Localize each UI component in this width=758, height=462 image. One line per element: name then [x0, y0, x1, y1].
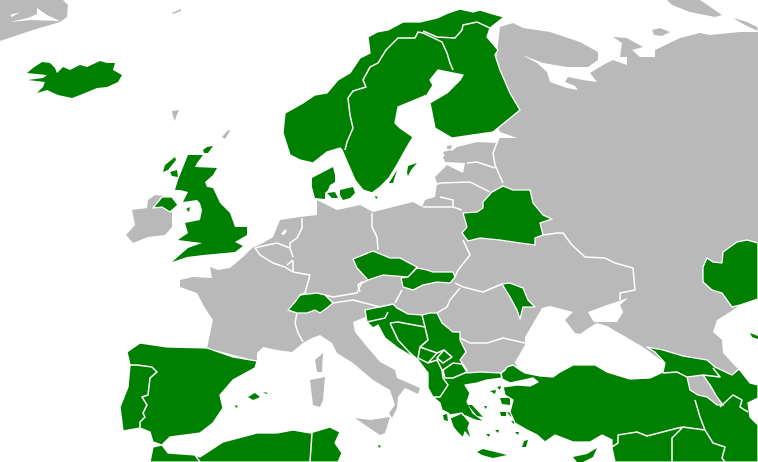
Cyprus: [573, 448, 597, 462]
Belarus: [462, 186, 552, 245]
Caspian Sea: [713, 300, 758, 385]
Black Sea: [515, 306, 665, 379]
Faroe and Shetland islands: [172, 110, 230, 139]
Turkey and the Middle East: [501, 347, 758, 462]
Nordic borders: [345, 22, 490, 150]
Evia and Greek islands: [378, 386, 528, 458]
Central Europe borders: [325, 213, 470, 307]
Jan Mayen: [172, 9, 181, 14]
Denmark: [312, 167, 378, 200]
Northern Ireland: [153, 197, 178, 212]
Armenia: [687, 375, 723, 405]
mainland Europe and Russia: [180, 23, 758, 418]
Slovakia: [401, 268, 455, 290]
Switzerland: [288, 293, 333, 313]
Arctic islands: [652, 0, 758, 36]
Spain and Portugal: [120, 343, 257, 445]
Balkan borders: [367, 312, 467, 397]
Sea of Azov: [588, 298, 628, 322]
Scottish islands and Man: [163, 146, 213, 212]
North Africa: [150, 427, 342, 462]
Moldova: [502, 283, 535, 319]
Baltic borders: [423, 140, 503, 210]
Czechia: [353, 251, 417, 280]
Eastern Europe borders: [437, 233, 635, 343]
Britain: [172, 155, 247, 262]
Kazakhstan Caspian shore: [750, 333, 758, 339]
Western Europe borders: [255, 218, 310, 342]
Estonian islands: [443, 145, 452, 157]
Turkey and Middle East borders: [501, 368, 748, 462]
Corsica: [315, 353, 323, 372]
Norway, Sweden and Finland: [283, 9, 520, 193]
Greenland fjords: [10, 8, 60, 22]
Greenland: [0, 0, 68, 41]
western Balkans and Greece: [365, 304, 502, 440]
Sardinia: [310, 377, 325, 407]
country borders: [128, 22, 748, 462]
Sicily: [355, 417, 390, 435]
Baltic islands: [389, 163, 417, 183]
Ijsselmeer: [281, 229, 287, 235]
Iceland: [27, 61, 122, 98]
Kazakhstan: [703, 240, 758, 307]
Balearic Islands: [235, 392, 268, 408]
Ireland: [126, 195, 172, 243]
Iberian and African borders: [128, 365, 312, 462]
